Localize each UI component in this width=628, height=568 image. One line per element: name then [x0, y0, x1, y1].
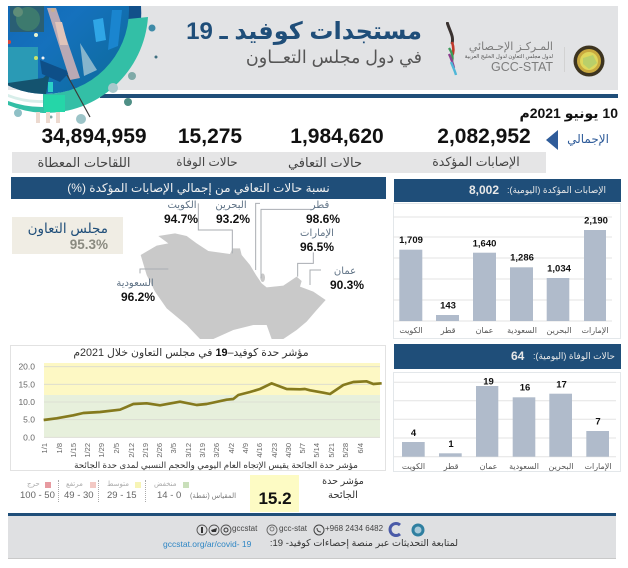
label: vaccines: اللقاحات المعطاة: [37, 155, 131, 170]
x axis labels: 1/1: [40, 443, 49, 453]
header artwork: medical circle: [8, 6, 158, 124]
footer text: لمتابعة التحديثات عبر منصة إحصاءات كوفيد- 19:: [270, 538, 458, 549]
bar chart: daily deaths: 4: [411, 428, 417, 439]
x axis labels: 2/12: [127, 443, 136, 458]
logo divider: [564, 47, 565, 72]
icon: whatsapp: [314, 524, 324, 536]
contact: gcc-stat: gcc-stat: [279, 524, 307, 533]
title: مستجدات كوفيد ـ 19: [186, 18, 422, 45]
scale: high: 49 - 30: [64, 490, 94, 501]
severity value label: مؤشر حدة: [322, 476, 364, 487]
callout: GCC average: مجلس التعاون: [28, 221, 108, 236]
map label: Oman: 90.3%: [330, 278, 364, 292]
heading: daily deaths: حالات الوفاة (اليومية):: [533, 351, 615, 361]
logo: GCC-Stat wordmark: المـركـز الإحـصائي: [469, 41, 553, 53]
bar chart: daily confirmed: 1,286: [510, 252, 534, 264]
bar chart: daily deaths: البحرين: [549, 462, 573, 471]
contact: phone: +968 2434 6482: [325, 524, 383, 533]
scale: low: منخفض: [154, 481, 176, 488]
map label: UAE: 96.5%: [300, 240, 334, 254]
heading: daily confirmed: الإصابات المؤكدة (اليومية):: [507, 185, 606, 195]
severity bands: [44, 363, 380, 437]
map label: Kuwait: 94.7%: [164, 212, 198, 226]
scale: caption: المقياس (نقطة): [190, 493, 236, 500]
chart caption: مؤشر حدة الجائحة يقيس الإتجاه العام اليومي والحجم النسبي لمدى حدة الجائحة: [74, 460, 358, 471]
banner rule: [100, 94, 618, 98]
x axis labels: 4/23: [270, 443, 279, 458]
bar chart: daily deaths: [393, 372, 621, 472]
map label: Oman: [330, 266, 364, 292]
scale: low: [154, 481, 189, 501]
total: recovered: 1,984,620: [290, 125, 384, 148]
heading: daily confirmed: [394, 179, 621, 202]
x axis labels: 1/15: [69, 443, 78, 458]
icon: platform C logo: [388, 522, 401, 537]
x axis labels: 2/26: [155, 443, 164, 458]
x axis labels: 1/8: [55, 443, 64, 453]
scale: critical: 100 - 50: [20, 490, 55, 501]
icons: social media: [196, 524, 232, 536]
panel: daily deaths: [393, 344, 621, 472]
callout: GCC average: [12, 217, 123, 254]
x axis labels: 4/9: [241, 443, 250, 453]
severity value label: [322, 476, 364, 501]
total: confirmed: 2,082,952: [437, 125, 531, 148]
panel: severity index line chart: [10, 345, 386, 471]
label: deaths: حالات الوفاة: [176, 155, 238, 169]
header banner: [8, 6, 618, 124]
logo: GCC emblem: [574, 46, 604, 76]
logo: GCC-Stat wordmark: [465, 41, 553, 74]
x axis labels: 3/12: [184, 443, 193, 458]
panel: recovery rate map: [11, 177, 386, 339]
x axis labels: 4/2: [227, 443, 236, 453]
bar chart: daily confirmed: عمان: [476, 326, 493, 335]
total label bar: [12, 152, 546, 173]
y axis labels: 20.0: [18, 362, 35, 372]
bar chart: daily deaths: 16: [520, 382, 530, 394]
scale: critical: [20, 481, 55, 501]
total: deaths: 15,275: [178, 125, 242, 148]
x axis labels: 3/19: [198, 443, 207, 458]
footer background: [8, 516, 616, 559]
logo: GCC-Stat wordmark: لدول مجلس التعاون لدول الخليج العربية: [465, 54, 553, 60]
logo: GCC-Stat ribbon: [446, 22, 458, 76]
map label: Bahrain: البحرين: [215, 200, 247, 211]
scale: critical: حرج: [27, 481, 40, 488]
x axis labels: 4/16: [255, 443, 264, 458]
bar chart: daily confirmed: 1,640: [473, 238, 496, 250]
date: 10 يونيو 2021م: [519, 105, 618, 121]
icon: GCC badge: [412, 524, 424, 536]
scale: low: 14 - 0: [157, 490, 181, 501]
map label: Saudi Arabia: [116, 278, 155, 304]
map label: Saudi Arabia: 96.2%: [121, 290, 155, 304]
scale: moderate: [107, 480, 141, 501]
label: total: الإجمالي: [567, 132, 609, 146]
scale: moderate: متوسط: [107, 481, 129, 488]
x axis labels: 2/19: [141, 443, 150, 458]
bar chart: daily confirmed: السعودية: [507, 326, 537, 335]
label: recovered: حالات التعافي: [288, 155, 362, 170]
callout: GCC average: 95.3%: [70, 237, 108, 252]
map label: Qatar: قطر: [311, 200, 329, 211]
x axis labels: 3/26: [212, 443, 221, 458]
map label: UAE: الإمارات: [300, 228, 334, 239]
y axis labels: 0.0: [23, 432, 35, 442]
icon: needle: [67, 75, 90, 117]
panel: daily confirmed cases: [393, 179, 621, 339]
bar chart: daily deaths: الإمارات: [584, 462, 612, 472]
bar chart: daily deaths: 17: [556, 380, 567, 390]
y axis labels: 15.0: [18, 379, 35, 389]
map label: Kuwait: [164, 200, 198, 226]
map label: Kuwait: الكويت: [167, 200, 197, 211]
bar chart: daily confirmed: 1,034: [547, 264, 572, 274]
map heading: [11, 177, 386, 199]
x axis labels: 2/5: [112, 443, 121, 453]
bar chart: daily deaths: الكويت: [402, 462, 425, 471]
map: GCC countries: [140, 202, 326, 339]
map heading: نسبة حالات التعافي من إجمالي الإصابات المؤكدة (%): [67, 181, 330, 195]
map label: Oman: عمان: [334, 266, 356, 277]
severity value label: الجائحة: [328, 490, 358, 501]
x axis labels: 5/28: [341, 443, 350, 458]
bar chart: daily deaths: السعودية: [509, 462, 539, 471]
y axis labels: 10.0: [18, 397, 35, 407]
heading: daily confirmed: 8,002: [469, 183, 499, 197]
x axis labels: 3/5: [169, 443, 178, 453]
map label: Bahrain: 93.2%: [216, 212, 250, 226]
bar chart: daily confirmed: البحرين: [547, 326, 571, 335]
icon: web: [266, 524, 278, 536]
bar chart: daily deaths: عمان: [480, 462, 497, 471]
bar chart: daily confirmed: 143: [440, 300, 456, 312]
map label: Bahrain: [215, 200, 250, 226]
scale: high: [64, 481, 96, 501]
total: vaccines: 34,894,959: [41, 125, 147, 148]
bar chart: daily confirmed: 2,190: [584, 216, 608, 226]
label: confirmed: الإصابات المؤكدة: [432, 155, 520, 169]
severity value box: [250, 475, 299, 512]
leader lines: [140, 203, 321, 285]
severity scale legend: [20, 480, 236, 502]
map label: Qatar: 98.6%: [306, 212, 340, 226]
x axis labels: 6/4: [356, 443, 365, 453]
heading: daily deaths: [394, 344, 621, 369]
heading: daily deaths: 64: [511, 349, 524, 363]
icon: floating droplets: [14, 24, 158, 124]
x axis labels: 4/30: [284, 443, 293, 458]
footer link: gccstat.org/ar/covid- 19: [163, 539, 251, 549]
severity line: [44, 381, 382, 420]
footer: [8, 513, 616, 559]
bar chart: daily deaths: قطر: [443, 462, 459, 471]
bar chart: daily confirmed: قطر: [440, 326, 456, 335]
contact: gccstat: gccstat: [232, 524, 257, 533]
scale: moderate: 29 - 15: [107, 490, 137, 501]
bar chart: daily confirmed: الكويت: [399, 326, 423, 335]
x axis labels: 5/7: [298, 443, 307, 453]
x axis labels: 5/14: [312, 443, 321, 458]
x axis labels: 5/21: [327, 443, 336, 458]
bar chart: daily deaths: 7: [595, 416, 601, 428]
chart title: مؤشر حدة كوفيد–19 في مجلس التعاون خلال 2021م: [73, 347, 309, 359]
x axis labels: 1/29: [97, 443, 106, 458]
subtitle: في دول مجلس التعــاون: [246, 47, 422, 67]
bar chart: daily confirmed: الإمارات: [581, 326, 609, 336]
x axis labels: [40, 443, 365, 458]
y axis labels: 5.0: [23, 415, 35, 425]
bar chart: daily deaths: 19: [483, 376, 494, 388]
scale: high: مرتفع: [66, 481, 83, 488]
bar chart: daily confirmed: 1,709: [399, 235, 423, 246]
x axis labels: 1/22: [83, 443, 92, 458]
map label: UAE: [300, 228, 334, 254]
bar chart: daily confirmed: [393, 203, 621, 339]
totals panel: [12, 125, 609, 173]
arrow: total pointer: [546, 130, 558, 150]
severity value box: 15.2: [258, 489, 292, 508]
y axis labels: [18, 362, 35, 442]
banner background: [8, 6, 618, 90]
bar chart: daily deaths: 1: [448, 439, 454, 450]
logo: GCC-Stat wordmark: GCC-STAT: [491, 60, 553, 74]
map label: Saudi Arabia: السعودية: [116, 278, 154, 289]
map label: Qatar: [306, 200, 340, 226]
footer rule: [8, 513, 616, 516]
